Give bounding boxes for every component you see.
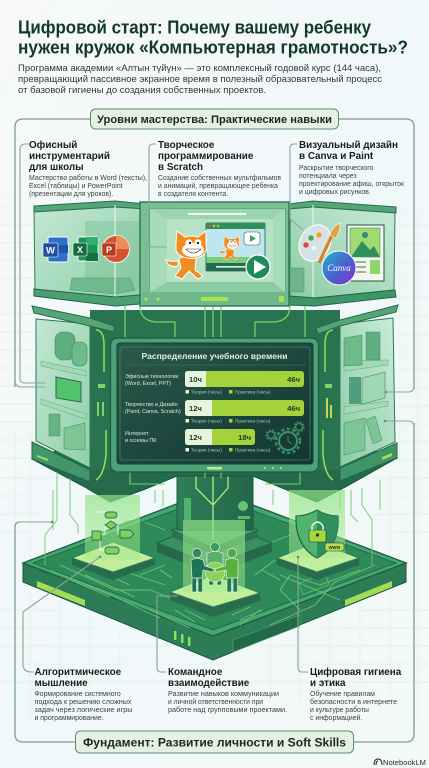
icon: shield: www — [328, 545, 340, 551]
bar row 1: (Word, Excel, PPT) — [125, 381, 171, 387]
intro text — [18, 63, 383, 95]
block: office: Excel (таблицы) и PowerPoint — [29, 182, 123, 190]
icon: Word: W — [46, 246, 55, 256]
block: design: Визуальный дизайн — [299, 140, 398, 151]
bar row 2: 46ч — [287, 404, 300, 413]
bar row 1 — [125, 371, 304, 394]
bar row 3: Практика (часы) — [235, 448, 271, 452]
bar row 3: и основы ПК — [125, 438, 157, 444]
block: teamwork: работе над групповыми проектами. — [168, 706, 287, 714]
block: algorithmic thinking: и программирование. — [34, 715, 104, 722]
scratch monitor — [140, 202, 289, 306]
bar row 1: Теория (часы) — [191, 390, 222, 394]
block: teamwork: Командное — [168, 667, 223, 678]
icon: poster — [347, 225, 384, 281]
icon: paint palette — [293, 219, 340, 267]
block: scratch: в создателя контента. — [158, 191, 228, 198]
title: Цифровой старт: Почему вашему ребенку — [18, 16, 372, 38]
bar row 1: Практика (часы) — [235, 390, 271, 394]
intro text: от базовой гигиены до создания собственных проектов. — [18, 85, 266, 95]
scratch video window — [206, 223, 265, 271]
block: hygiene: с информацией. — [310, 714, 362, 722]
block: algorithmic thinking: подхода к решению сложных — [34, 699, 132, 706]
platform board — [23, 490, 406, 660]
icon: team handshake — [191, 542, 238, 592]
block: hygiene: безопасности в интернете — [310, 698, 397, 706]
central body behind monitor — [32, 305, 397, 502]
bar row 2: Творчество и Дизайн — [125, 401, 178, 408]
block: scratch: Творческое — [158, 140, 215, 151]
banner: bottom: Фундамент: Развитие личности и Soft Skills — [83, 736, 346, 750]
pillar — [157, 470, 272, 575]
upper-right cabinet: design — [288, 201, 396, 306]
block: scratch: и анимаций, превращающее ребенка — [158, 182, 278, 190]
block: design: и цифровых рисунков. — [299, 189, 371, 196]
block: office — [29, 140, 147, 198]
tile: algorithmic — [72, 495, 155, 580]
icon: PowerPoint — [102, 236, 130, 262]
block: scratch: Создание собственных мультфильмов — [158, 174, 281, 182]
bar row 2: Теория (часы) — [191, 418, 222, 424]
block: teamwork: Развитие навыков коммуникации — [168, 691, 279, 698]
icon: PowerPoint: P — [106, 245, 112, 255]
bar row 3: 12ч — [189, 433, 202, 442]
block: hygiene: Цифровая гигиена — [310, 667, 402, 678]
block: teamwork — [168, 667, 287, 714]
block: scratch: программирование — [158, 151, 254, 162]
icon: play button — [246, 255, 270, 279]
bar row 3 — [125, 429, 271, 452]
bar row 2 — [125, 400, 304, 424]
icon: Excel — [73, 237, 98, 261]
block: algorithmic thinking: Алгоритмическое — [34, 667, 122, 678]
circuit traces down to board — [45, 472, 380, 565]
block: hygiene: и культуре работы — [310, 706, 369, 714]
banner: top: Уровни мастерства: Практические навыки — [97, 114, 332, 126]
bar row 1: 10ч — [189, 375, 202, 384]
bar row 2: Практика (часы) — [235, 418, 271, 424]
intro text: превращающий пассивное экранное время в полезный образовательный процесс — [18, 74, 383, 84]
block: hygiene: Обучение правилам — [310, 690, 375, 698]
dashboard monitor — [110, 338, 318, 472]
bar row 2: (Paint, Canva, Scratch) — [125, 409, 181, 415]
block: office: Офисный — [29, 140, 77, 151]
block: design: проектирование афиш, открыток — [299, 181, 405, 188]
tile: teamwork — [170, 520, 260, 617]
upper-left cabinet: office tools — [34, 201, 145, 306]
block: office: инструментарий — [29, 151, 110, 162]
block: design: потенциала через — [299, 173, 357, 180]
block: hygiene — [310, 667, 402, 722]
block: office: Мастерство работы в Word (тексты), — [29, 174, 147, 182]
block: algorithmic thinking: задач через логические игры — [34, 707, 133, 714]
main frame — [15, 119, 414, 742]
icon: Word — [43, 237, 68, 262]
icon: shield — [296, 510, 344, 558]
icon: Canva: Canva — [327, 263, 351, 273]
bar row 1: Эфисные технологии — [125, 374, 178, 380]
block: scratch: в Scratch — [158, 162, 203, 173]
bar row 2: 12ч — [189, 404, 202, 413]
bar row 1: 46ч — [287, 375, 300, 384]
block: design: Раскрытие творческого — [299, 165, 374, 172]
NotebookLM logo: NotebookLM — [383, 758, 426, 767]
bar row 3: Интернет — [125, 431, 149, 437]
block: teamwork: взаимодействие — [168, 678, 250, 689]
block: algorithmic thinking — [34, 667, 133, 722]
banner: top — [90, 109, 338, 129]
bar row 3: Теория (часы) — [191, 448, 222, 452]
icon: Excel: X — [77, 245, 83, 255]
block: algorithmic thinking: мышление — [34, 678, 88, 689]
block: office: для школы — [29, 162, 84, 173]
icon: scratch cat — [166, 231, 207, 279]
intro text: Программа академии «Алтын түйүн» — это комплексный годовой курс (144 часа), — [18, 63, 381, 73]
banner: bottom — [76, 731, 354, 753]
block: hygiene: и этика — [310, 678, 346, 689]
lower-left cabinet — [32, 306, 114, 482]
chart title: Распределение учебного времени — [142, 352, 288, 361]
tile: security — [277, 490, 359, 580]
block: design: в Canva и Paint — [299, 151, 374, 162]
block: office: (презентации для уроков). — [29, 191, 113, 198]
icon: flowchart — [92, 512, 134, 554]
title line 2: нужен кружок «Компьютерная грамотность»? — [18, 36, 408, 58]
block: algorithmic thinking: Формирование системного — [34, 691, 121, 698]
block: scratch — [158, 140, 281, 198]
icon: Canva — [322, 251, 356, 285]
block: teamwork: и личной ответственности при — [168, 698, 263, 706]
lower-right cabinet — [316, 305, 398, 481]
leader lines — [15, 144, 414, 672]
bar row 3: 18ч — [238, 433, 251, 442]
block: design — [299, 140, 405, 196]
icon: gears — [266, 422, 304, 453]
